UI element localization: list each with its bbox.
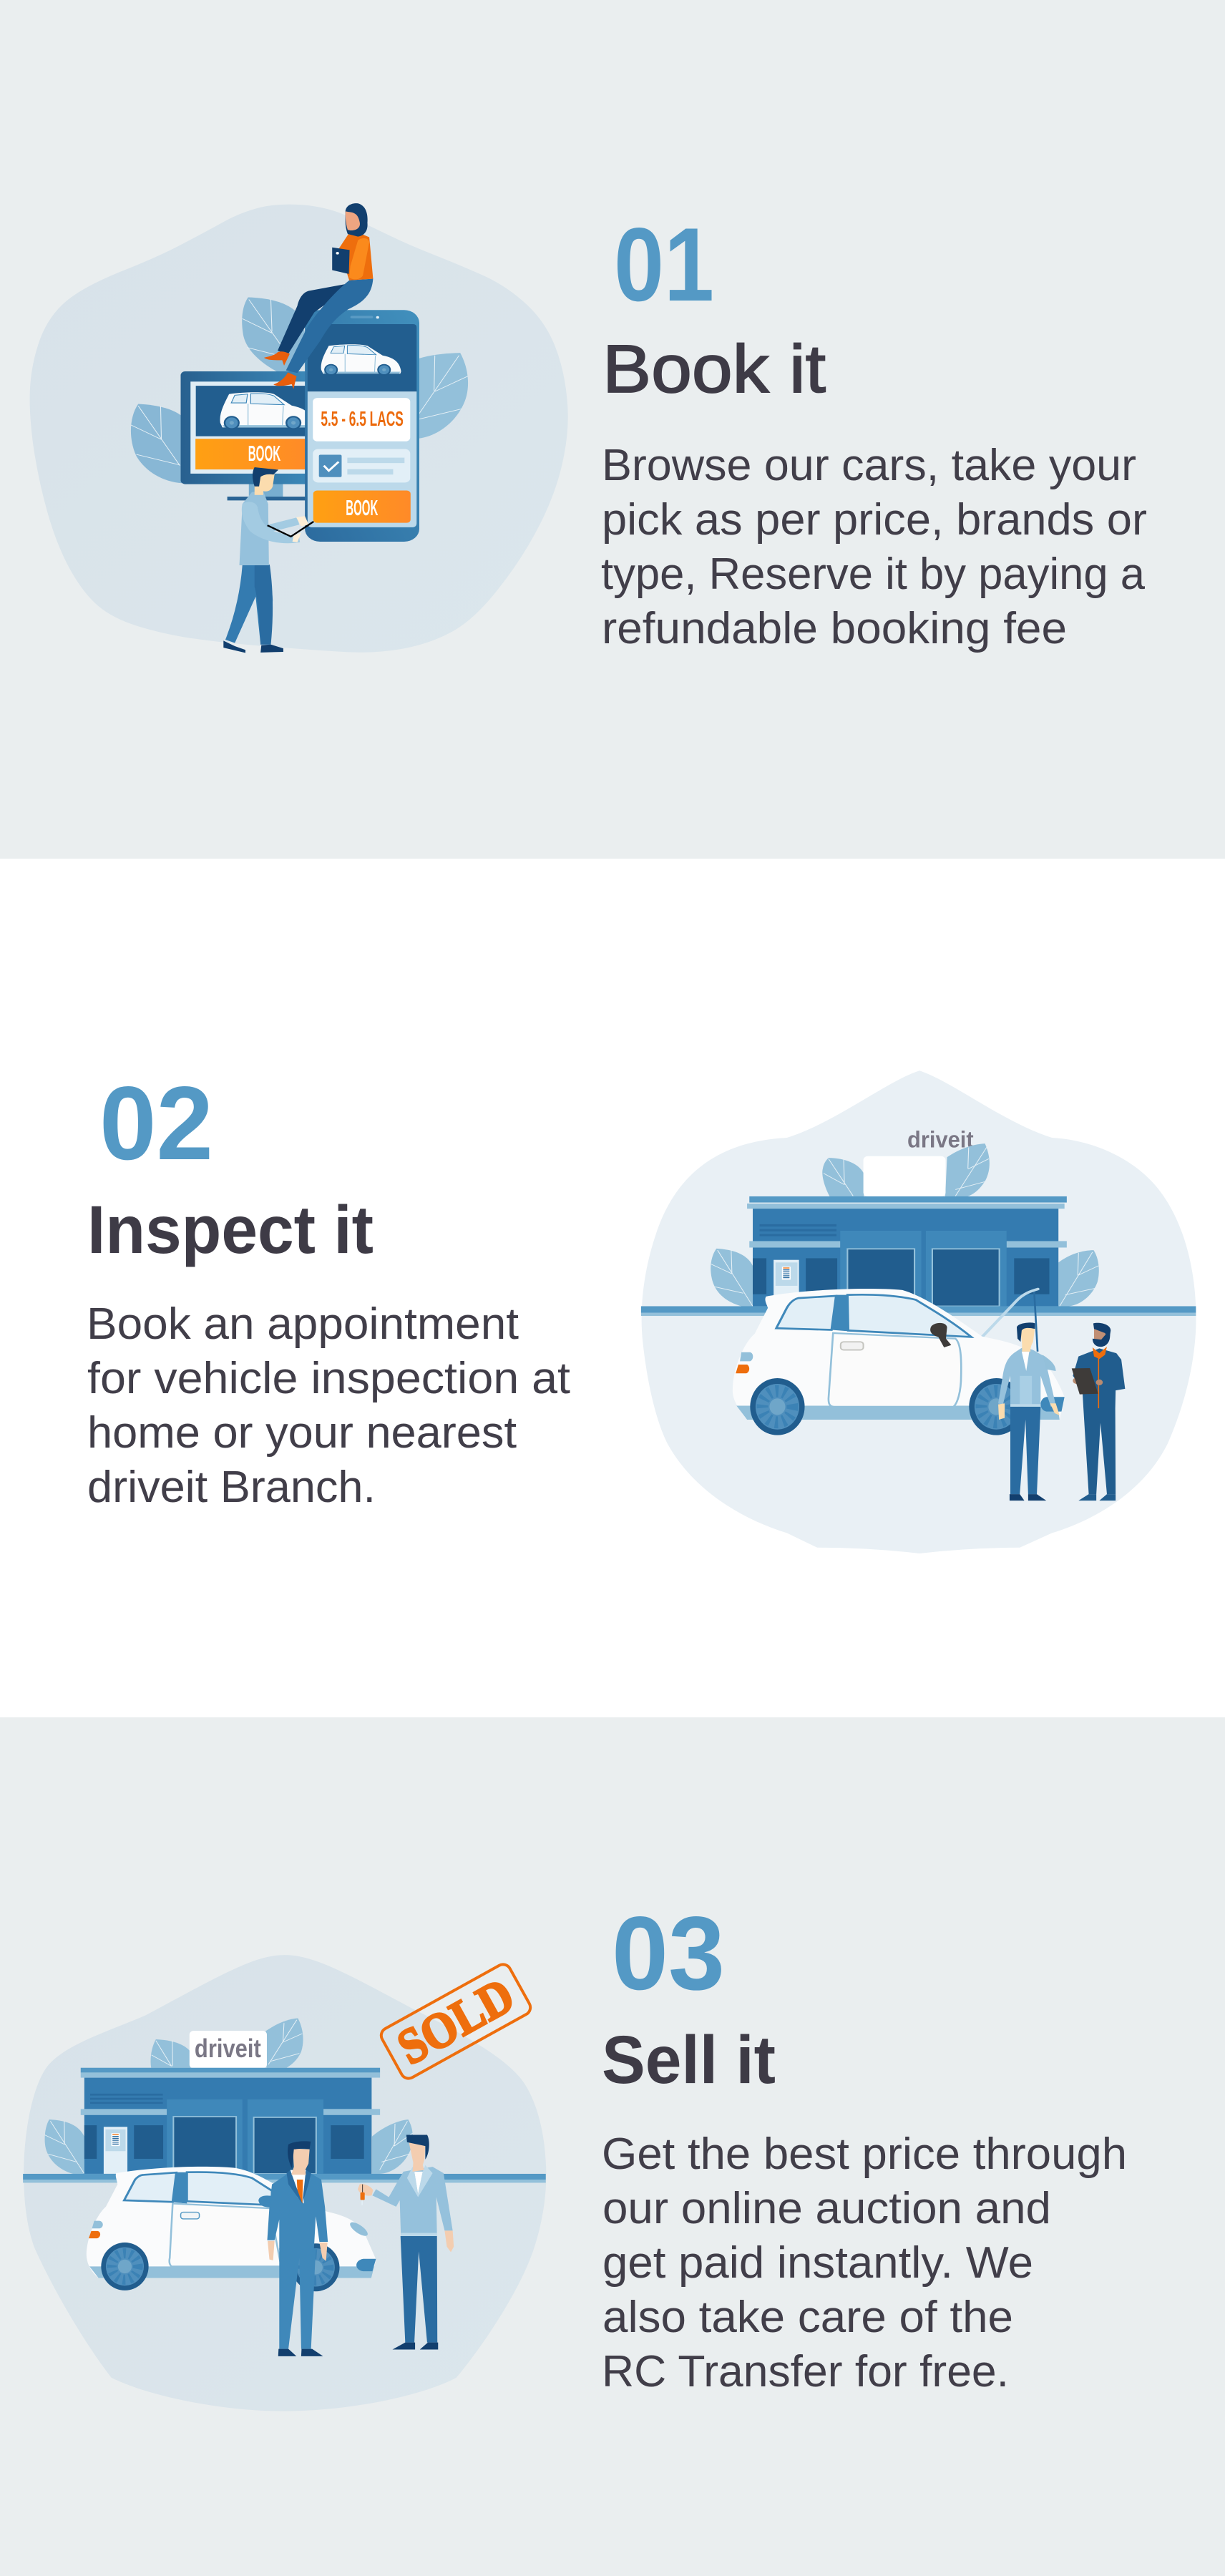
- figure: woman sitting on phone: [264, 203, 373, 389]
- panel: step 2 inspect it: [87, 1065, 1196, 1553]
- body text step 3: get paid instantly. We: [602, 2238, 1033, 2288]
- step number 01: 01: [614, 206, 714, 323]
- panel: step 1 book it: [30, 203, 1147, 653]
- heading sell it: Sell it: [602, 2022, 776, 2098]
- body text step 2: [87, 1299, 570, 1512]
- step number 02: 02: [99, 1065, 213, 1181]
- monitor: [180, 371, 313, 500]
- icon: leaf right: [419, 353, 468, 439]
- figure: customer with car keys: [358, 2135, 454, 2349]
- showroom building: [81, 2068, 380, 2174]
- body text step 2: home or your nearest: [87, 1408, 517, 1458]
- panel: step 3 sell it: [23, 1895, 1127, 2411]
- icon: front wheel: [969, 1378, 1024, 1435]
- body text step 1: type, Reserve it by paying a: [601, 550, 1146, 599]
- body text step 1: pick as per price, brands or: [602, 495, 1147, 545]
- icon: leaves: [44, 2019, 413, 2174]
- figure: customer: [998, 1322, 1060, 1501]
- step number 03: 03: [612, 1895, 725, 2011]
- illustration: car handover at branch: [23, 1955, 546, 2411]
- icon: leaf upper left: [242, 297, 307, 376]
- sold stamp: SOLD: [389, 1968, 523, 2076]
- icon: car on monitor: [220, 392, 313, 430]
- panel: background section 3: [0, 1717, 1225, 2576]
- showroom building: [747, 1196, 1067, 1306]
- icon: rear wheel: [750, 1378, 805, 1435]
- sign board: [864, 1156, 945, 1196]
- body text step 1: [601, 441, 1147, 653]
- heading book it: Book it: [602, 331, 826, 407]
- illustration: booking a car by phone and monitor: [30, 203, 568, 653]
- figure: salesman in suit: [258, 2141, 328, 2356]
- price label: 5.5 - 6.5 LACS: [321, 407, 404, 430]
- heading inspect it: Inspect it: [87, 1192, 374, 1268]
- icon: leaves: [711, 1143, 1099, 1306]
- body text step 3: Get the best price through: [602, 2129, 1127, 2179]
- body text step 1: refundable booking fee: [602, 604, 1067, 653]
- icon: front wheel: [292, 2243, 339, 2291]
- icon: car on phone: [321, 344, 401, 376]
- body text step 2: Book an appointment: [87, 1299, 519, 1349]
- blob background: [642, 1070, 1196, 1553]
- blob background: [30, 205, 568, 653]
- figure: inspector with clipboard: [1072, 1323, 1125, 1501]
- icon: leaf lower left: [131, 404, 182, 483]
- ground strip: [641, 1306, 1196, 1316]
- figure: man with tablet: [223, 467, 313, 653]
- phone: BOOK: [346, 496, 378, 520]
- body text step 3: [602, 2129, 1127, 2396]
- body text step 2: driveit Branch.: [87, 1463, 376, 1512]
- body text step 3: our online auction and: [602, 2184, 1051, 2233]
- ground strip: [23, 2174, 546, 2182]
- icon: rear wheel: [101, 2243, 149, 2290]
- illustration: vehicle inspection at branch: [641, 1070, 1196, 1553]
- car: [87, 2167, 376, 2291]
- panel: background section 1: [0, 0, 1225, 859]
- blob background: [24, 1955, 546, 2411]
- car with open hood: [733, 1289, 1065, 1435]
- monitor: BOOK: [248, 442, 280, 466]
- body text step 2: for vehicle inspection at: [87, 1354, 570, 1403]
- body text step 3: RC Transfer for free.: [602, 2347, 1009, 2396]
- body text step 3: also take care of the: [602, 2293, 1013, 2342]
- phone: [305, 310, 419, 542]
- body text step 1: Browse our cars, take your: [602, 441, 1136, 490]
- sign board with logo: driveit: [195, 2034, 261, 2063]
- logo text driveit: driveit: [907, 1126, 974, 1153]
- panel: background section 2: [0, 859, 1225, 1717]
- sign board with logo: [190, 2031, 267, 2069]
